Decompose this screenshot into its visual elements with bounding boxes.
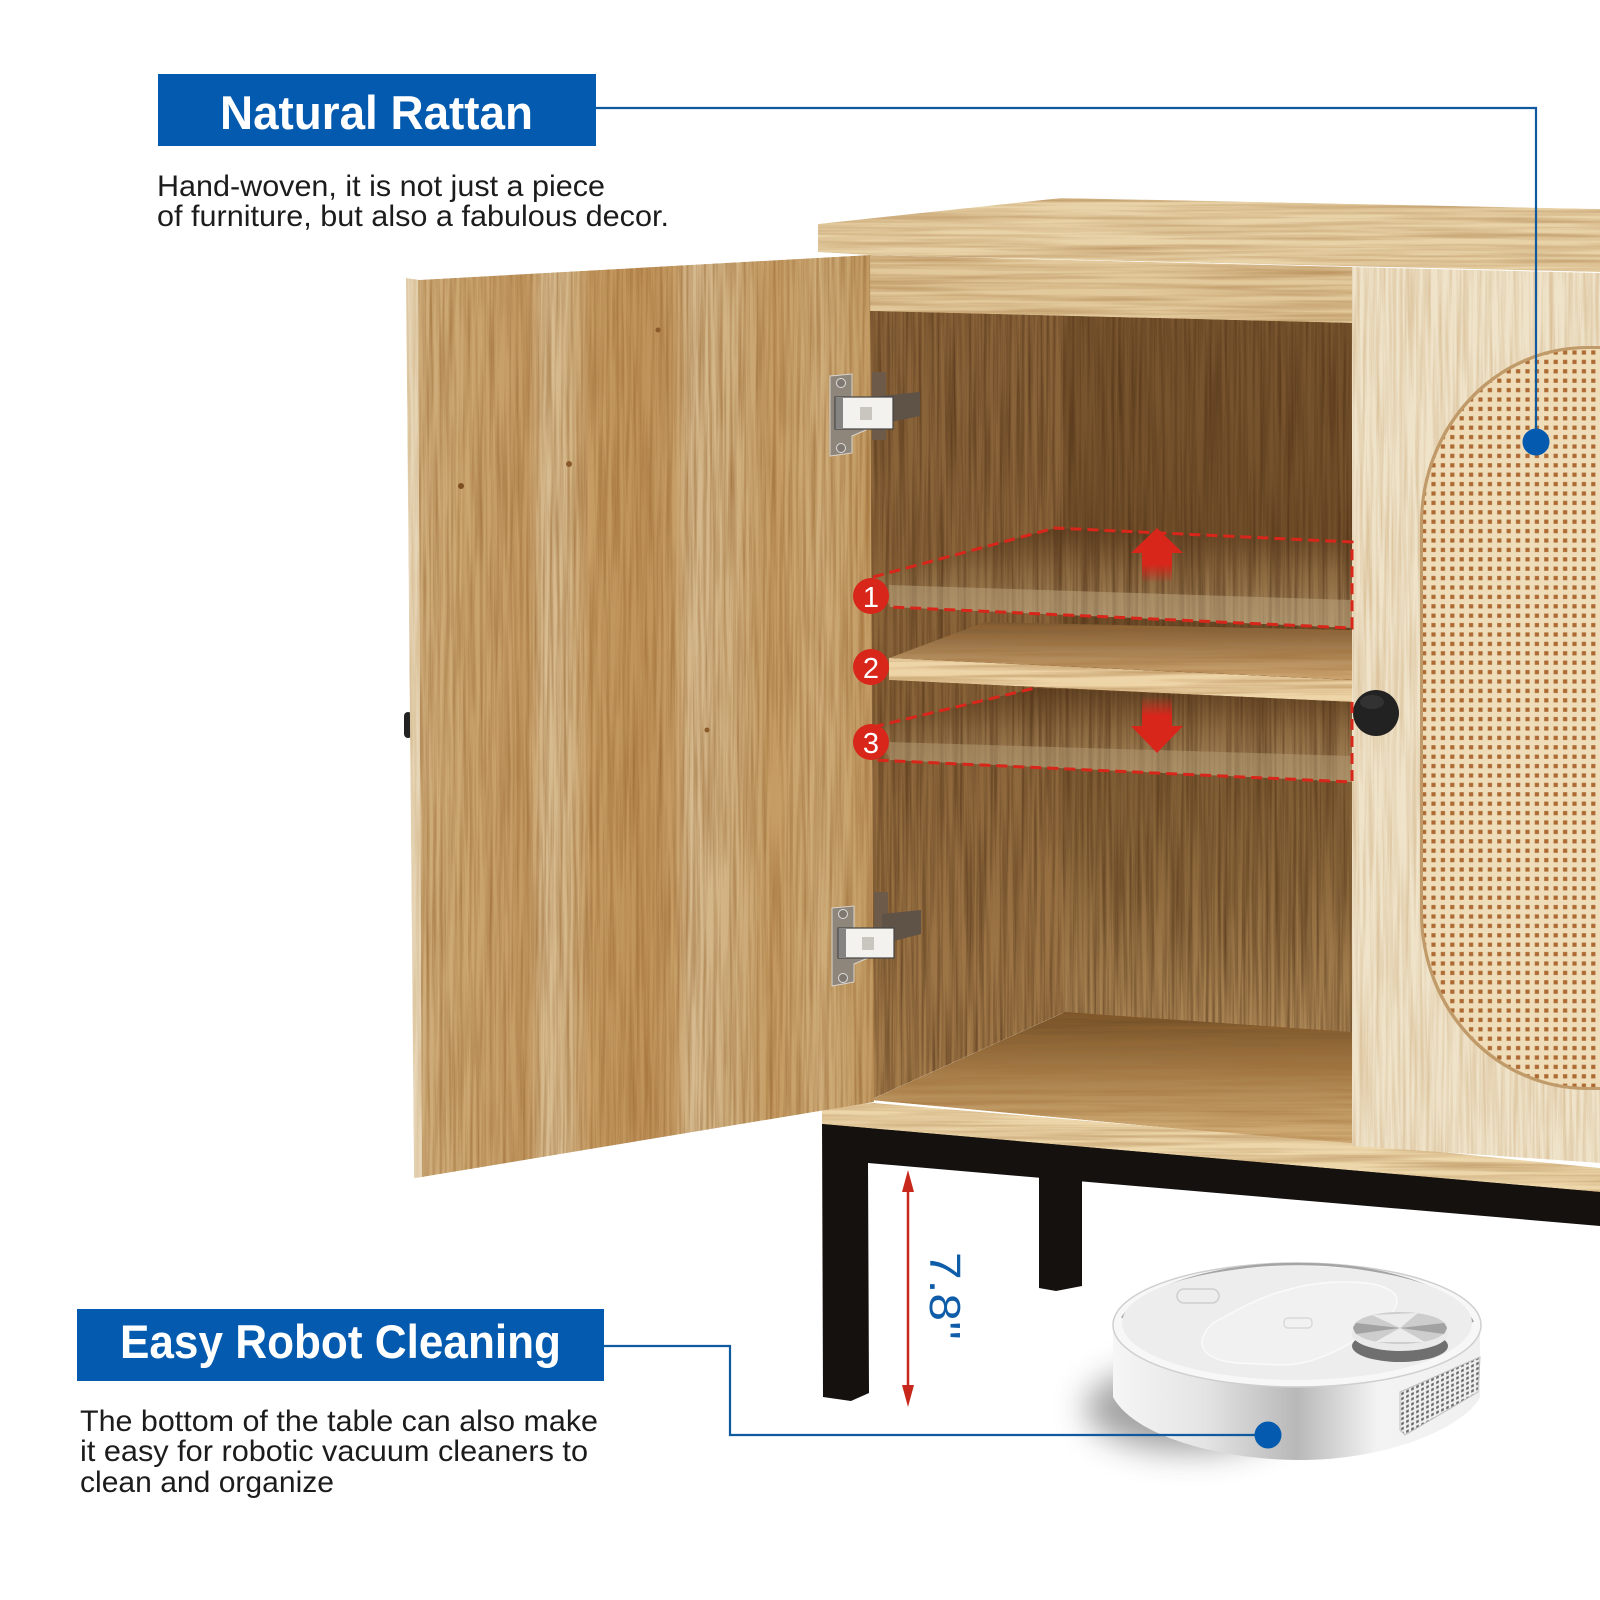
text: robot cleaning description: it easy for robotic vacuum cleaners to — [80, 1435, 588, 1468]
rattan oval — [1420, 346, 1600, 1090]
robot vacuum — [1085, 1263, 1481, 1460]
heading: Natural Rattan — [158, 74, 596, 146]
badge 1 — [853, 578, 889, 614]
right door with rattan panel — [1352, 267, 1600, 1163]
door knob — [1353, 690, 1399, 736]
connector: robot callout — [604, 1346, 1282, 1448]
badge 2: 2 — [863, 653, 879, 685]
text: robot cleaning description: The bottom of the table can also make — [80, 1405, 598, 1438]
heading: Easy Robot Cleaning: Easy Robot Cleaning — [120, 1315, 561, 1368]
cabinet top board — [818, 198, 1600, 272]
heading: Easy Robot Cleaning — [77, 1309, 604, 1381]
cabinet bottom board — [822, 1103, 1600, 1192]
text: robot cleaning description — [80, 1405, 598, 1499]
left door rear knob — [404, 712, 412, 738]
text: rattan description: Hand-woven, it is not just a piece — [157, 170, 605, 203]
text: rattan description: of furniture, but also a fabulous decor. — [157, 200, 669, 233]
ghost shelf 1 — [873, 528, 1352, 628]
heading: Natural Rattan: Natural Rattan — [220, 86, 533, 139]
robot body — [1113, 1325, 1480, 1460]
lidar turret — [1352, 1312, 1448, 1362]
robot vent grille — [1400, 1357, 1480, 1435]
robot top — [1113, 1263, 1481, 1387]
arrow up — [1131, 528, 1183, 583]
badge 3 — [853, 724, 889, 760]
badge 1: 1 — [863, 582, 879, 614]
adjustable shelf positions — [873, 528, 1352, 782]
arrow down — [1131, 696, 1183, 753]
height dimension arrow — [902, 1170, 914, 1407]
cabinet floor board — [870, 1012, 1352, 1145]
open left door — [406, 255, 874, 1178]
text: rattan description — [157, 170, 669, 233]
connector: rattan callout — [596, 108, 1550, 456]
cabinet illustration — [404, 198, 1600, 1401]
hinge upper — [830, 372, 920, 456]
text: robot cleaning description: clean and organize — [80, 1466, 334, 1499]
door knots — [458, 328, 710, 732]
interior left wall — [870, 255, 1065, 1100]
badge 2 — [853, 649, 889, 685]
interior back wall — [1063, 300, 1353, 1032]
hinge lower — [832, 892, 921, 986]
top rail under counter — [870, 255, 1352, 323]
height label 7.8 inches: 7.8'' — [920, 1252, 969, 1340]
robot shadow — [1085, 1364, 1295, 1452]
badge 3: 3 — [863, 728, 879, 760]
middle shelf — [889, 622, 1352, 702]
ghost shelf 3 — [873, 688, 1352, 782]
metal frame: front leg, back leg and rail — [822, 1118, 1600, 1401]
